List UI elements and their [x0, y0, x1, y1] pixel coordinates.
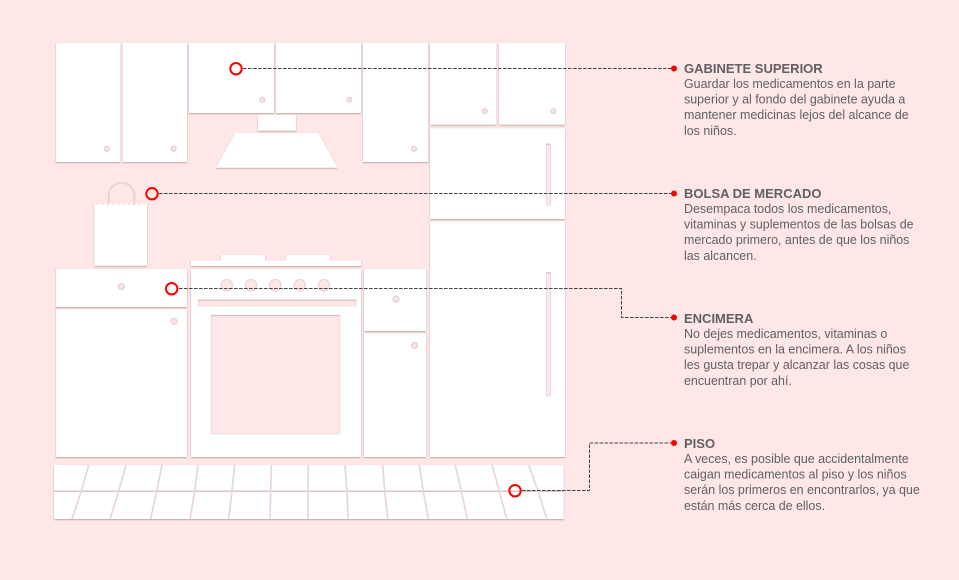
text: piso [684, 436, 920, 513]
text: gabinete superior: superior y al fondo del gabinete ayuda a [684, 92, 905, 106]
stove [191, 255, 361, 457]
text: gabinete superior: mantener medicinas lejos del alcance de [684, 108, 909, 122]
text: encimera: No dejes medicamentos, vitaminas o [684, 327, 887, 341]
text: bolsa de mercado: mercado primero, antes de que los niños [684, 233, 909, 247]
base cabinet right [364, 269, 426, 457]
callout line: encimera [166, 283, 677, 320]
text: gabinete superior [684, 61, 909, 138]
text: gabinete superior: los niños. [684, 124, 737, 138]
text: encimera: ENCIMERA [684, 311, 754, 326]
text: bolsa de mercado: BOLSA DE MERCADO [684, 186, 821, 201]
text: bolsa de mercado: las alcancen. [684, 249, 757, 263]
floor tiles [54, 465, 564, 519]
callout line: gabinete superior [230, 63, 677, 74]
text: encimera: suplementos en la encimera. A los niños [684, 342, 906, 356]
text: bolsa de mercado: vitaminas y suplementos de las bolsas de [684, 218, 914, 232]
text: encimera: les gusta trepar y alcanzar las cosas que [684, 358, 909, 372]
text: gabinete superior: GABINETE SUPERIOR [684, 61, 823, 76]
icon: shopping bag [94, 183, 147, 266]
text: piso: A veces, es posible que accidentalmente [684, 452, 909, 466]
base cabinet left [56, 269, 187, 457]
callout line: piso [509, 440, 677, 496]
text: bolsa de mercado [684, 186, 914, 263]
text: piso: PISO [684, 436, 715, 451]
text: encimera [684, 311, 909, 388]
callout line: bolsa de mercado [146, 188, 677, 199]
text: piso: serán los primeros en encontrarlos, ya que [684, 483, 920, 497]
text: piso: están más cerca de ellos. [684, 499, 825, 513]
text: bolsa de mercado: Desempaca todos los medicamentos, [684, 202, 891, 216]
upper cabinets [56, 43, 565, 162]
text: encimera: encuentran por ahí. [684, 374, 792, 388]
range hood [216, 115, 337, 168]
text: piso: caigan medicamentos al piso y los niños [684, 468, 907, 482]
refrigerator [430, 128, 565, 457]
text: gabinete superior: Guardar los medicamentos en la parte [684, 77, 896, 91]
